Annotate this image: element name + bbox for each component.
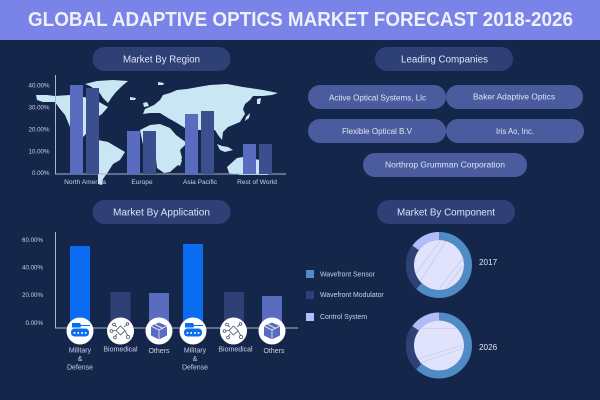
company: Northrop Grumman [363,153,527,177]
bars [70,85,272,174]
label: 2026: 2026 [479,343,498,352]
heading: Leading Companies [375,47,513,71]
icon: box [258,318,286,344]
icon: tank [66,318,94,344]
category labels: Biomedical [218,346,253,354]
company: Iris Ao: Iris Ao, Inc. [496,126,534,136]
category labels: Defense [67,364,93,372]
world map [36,80,278,185]
category labels: & [193,356,198,363]
icon: tank [180,318,206,344]
y axis labels: 0.00% [32,170,50,177]
y axis labels: 0.00% [25,320,43,327]
company: Flexible Optical: Flexible Optical B.V [342,126,412,136]
y axis labels: 10.00% [28,148,50,156]
legend: component [306,270,384,321]
legend: component: Control System [320,314,367,321]
y axis labels [28,82,50,177]
icon: box [146,318,172,344]
x axis labels: Rest of World [237,179,277,186]
title banner: GLOBAL ADAPTIVE OPTICS MARKET FORECAST 2018-2026 [28,9,573,31]
category labels: Military [184,348,207,354]
label: 2017: 2017 [479,258,498,267]
bars [70,244,282,328]
legend: component: Wavefront Modulator [320,292,384,299]
y axis labels: 20.00% [28,126,50,134]
company: Northrop Grumman: Northrop Grumman Corporation [385,160,505,170]
heading: Market By Component: Market By Component [397,206,495,218]
donut chart 2026 [410,312,468,374]
heading: Market By Component [377,200,515,224]
x axis labels [64,179,277,186]
company: Baker Adaptive Optics [446,85,583,109]
donut chart 2017 [410,232,468,294]
heading: Market By Application [92,200,230,224]
legend: component: Wavefront Sensor [320,272,376,278]
y axis labels [22,237,43,327]
panel: market by application chart [22,232,298,372]
company: Active Optical Systems: Active Optical Systems, Llc [329,92,427,102]
x axis labels: Europe [131,179,153,186]
company: Baker Adaptive Optics: Baker Adaptive Optics [473,92,555,102]
category labels [67,346,285,372]
panel: leading companies [308,85,584,177]
icon: network [107,318,134,344]
category labels: Others [148,348,170,355]
category labels: Military [69,348,92,354]
icon: network [220,318,247,344]
panel: market by region chart [28,75,286,186]
y axis labels: 30.00% [28,104,50,112]
y axis labels: 60.00% [22,237,43,244]
heading: Market By Region [92,47,230,71]
heading: Market By Region: Market By Region [123,54,200,66]
company: Flexible Optical [308,119,446,143]
category labels: Others [263,348,285,355]
heading: Market By Application: Market By Application [113,206,210,218]
axes [56,232,298,328]
heading: Leading Companies: Leading Companies [401,54,488,66]
x axis labels: Asia Pacific [183,179,218,186]
y axis labels: 40.00% [22,264,43,272]
y axis labels: 20.00% [22,292,43,299]
category labels: Biomedical [103,346,138,354]
axes [56,75,286,174]
title banner [0,0,600,40]
company: Iris Ao [446,119,584,143]
category labels: & [78,356,83,363]
x axis labels: North America [64,179,106,186]
y axis labels: 40.00% [28,82,50,90]
company: Active Optical Systems [308,85,446,109]
category labels: Defense [182,364,208,372]
